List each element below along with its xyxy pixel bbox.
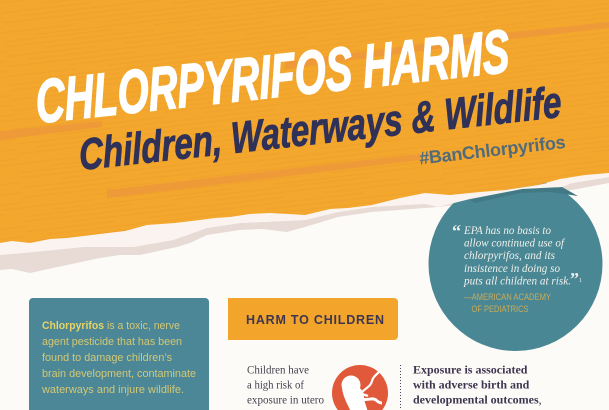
circle top shadow: [470, 187, 578, 203]
quote text: EPA has no basis to: [463, 225, 551, 237]
body text: in utero exposure: Children have: [247, 364, 309, 376]
quote text: puts all children at risk.: [463, 276, 571, 288]
torn paper shadow strip: [0, 177, 609, 273]
icon: fetus: [332, 365, 388, 410]
banner stripes: [0, 22, 609, 198]
orange header banner: [0, 0, 609, 243]
footnote: 1: [579, 278, 582, 284]
quote attribution: [464, 292, 551, 314]
body text: adverse outcomes: with adverse birth and: [413, 378, 530, 392]
intro text: brain development, contaminate: [42, 368, 196, 380]
torn paper white strip: [0, 173, 609, 255]
body text: adverse outcomes: ,: [539, 392, 542, 406]
opening quote mark: “: [452, 221, 461, 241]
quote circle: [428, 177, 602, 351]
section heading: harm to children: HARM TO CHILDREN: [246, 313, 384, 327]
intro text: Chlorpyrifos: [42, 320, 104, 332]
body text: in utero exposure: exposure in utero: [247, 394, 324, 406]
section heading: harm to children: [228, 298, 398, 340]
intro text: waterways and injure wildlife.: [41, 384, 184, 396]
intro panel: [29, 298, 209, 410]
quote text: chlorpyrifos, and its: [464, 250, 556, 262]
body text: in utero exposure: [247, 364, 324, 406]
hashtag: #BanChlorpyrifos: [418, 132, 567, 168]
title: [34, 17, 563, 180]
white torn edge over circle: [372, 173, 609, 207]
closing quote mark: ”: [570, 269, 579, 289]
quote text: [463, 225, 571, 288]
body text: in utero exposure: a high risk of: [247, 380, 304, 392]
quote text: insistence in doing so: [464, 263, 560, 275]
body text: adverse outcomes: Exposure is associated: [413, 362, 528, 376]
quote attribution: —AMERICAN ACADEMY: [464, 292, 551, 302]
quote text: allow continued use of: [464, 238, 566, 250]
dotted divider: [400, 365, 402, 410]
quote attribution: OF PEDIATRICS: [472, 304, 528, 314]
body text: adverse outcomes: developmental outcomes: [413, 392, 539, 406]
intro text: [41, 320, 196, 396]
intro text: agent pesticide that has been: [42, 336, 182, 348]
intro text: is a toxic, nerve: [107, 320, 180, 332]
intro text: found to damage children’s: [42, 352, 172, 364]
